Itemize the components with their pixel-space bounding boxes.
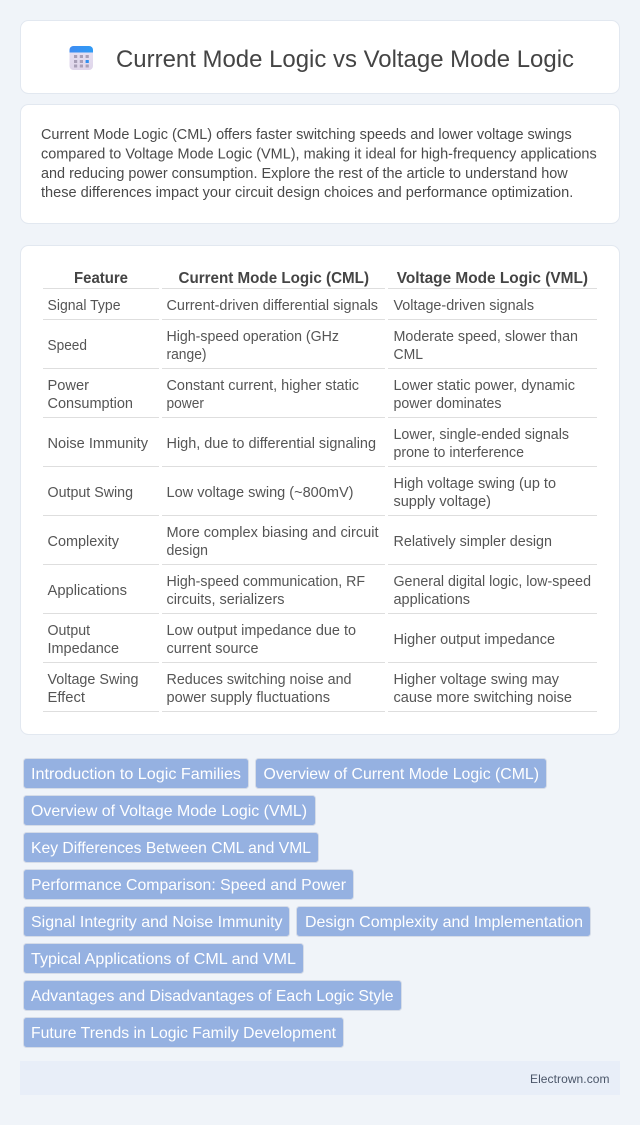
tag: VML overview — [24, 796, 316, 826]
table header row: Voltage Mode Logic (VML) — [397, 270, 588, 287]
row: power consumption: Constant current, higher static — [166, 378, 359, 394]
row: voltage swing effect: Effect — [48, 690, 85, 706]
row: noise immunity: Lower, single-ended signals — [394, 427, 569, 443]
row: output swing: High voltage swing (up to — [394, 476, 556, 492]
row: output impedance: Output — [48, 623, 90, 639]
row: voltage swing effect — [43, 672, 597, 712]
row: noise immunity — [43, 427, 597, 467]
tag: design complexity — [296, 906, 590, 936]
tag: key differences — [24, 832, 318, 862]
tag: typical applications: Typical Applications of CML and VML — [31, 951, 296, 968]
tag: future trends — [24, 1018, 344, 1048]
row: output swing — [43, 476, 597, 516]
row: applications: applications — [394, 592, 470, 608]
panel: introduction — [20, 104, 620, 224]
row: signal type: Current-driven differential signals — [166, 298, 378, 314]
row: speed: Moderate speed, slower than — [394, 329, 578, 345]
row: applications: General digital logic, low-speed — [394, 574, 591, 590]
row: voltage swing effect: cause more switching noise — [394, 690, 572, 706]
panel: title header — [20, 20, 620, 94]
row: noise immunity: Noise Immunity — [48, 436, 149, 452]
tag: performance — [24, 870, 354, 900]
tag: introduction — [24, 758, 248, 788]
intro paragraph — [41, 127, 597, 201]
row: applications: circuits, serializers — [166, 592, 284, 608]
row: speed: CML — [394, 347, 423, 363]
row: speed: High-speed operation (GHz — [166, 329, 339, 345]
row: output swing: supply voltage) — [394, 494, 491, 510]
intro paragraph: compared to Voltage Mode Logic (VML), making it ideal for high-frequency applications — [41, 146, 597, 162]
row: output swing: Output Swing — [48, 485, 133, 501]
row: power consumption: Consumption — [48, 396, 133, 412]
row: output impedance: current source — [166, 641, 258, 657]
tag: advantages — [24, 980, 402, 1010]
row: power consumption: Lower static power, dynamic — [394, 378, 575, 394]
row: output impedance: Higher output impedance — [394, 632, 555, 648]
row: applications: Applications — [48, 583, 127, 599]
row: voltage swing effect: Higher voltage swing may — [394, 672, 560, 688]
panel: comparison table — [20, 246, 620, 734]
icon: calendar grid — [70, 46, 93, 70]
row: noise immunity: prone to interference — [394, 445, 524, 461]
row: power consumption: power — [166, 396, 204, 412]
tag: advantages: Advantages and Disadvantages of Each Logic Style — [31, 988, 394, 1005]
row: signal type: Signal Type — [48, 298, 120, 314]
row: speed — [43, 329, 597, 369]
table header row: Feature — [74, 270, 128, 287]
tag: performance: Performance Comparison: Speed and Power — [31, 877, 347, 894]
row: voltage swing effect: power supply fluctuations — [166, 690, 330, 706]
row: output swing: Low voltage swing (~800mV) — [166, 485, 354, 501]
row: output impedance: Impedance — [48, 641, 119, 657]
tag: introduction: Introduction to Logic Families — [31, 766, 241, 783]
row: speed: range) — [166, 347, 206, 363]
table header row — [43, 270, 597, 289]
row: voltage swing effect: Voltage Swing — [48, 672, 138, 688]
row: complexity: Relatively simpler design — [394, 534, 552, 550]
tag: signal integrity: Signal Integrity and Noise Immunity — [31, 914, 282, 931]
row: complexity — [43, 525, 597, 565]
row: noise immunity: High, due to differential signaling — [166, 436, 376, 452]
tag: CML overview: Overview of Current Mode Logic (CML) — [264, 766, 539, 783]
title: Current Mode Logic vs Voltage Mode Logic — [116, 46, 574, 73]
intro paragraph: and reducing power consumption. Explore the rest of the article to understand how — [41, 166, 568, 182]
row: complexity: More complex biasing and circuit — [166, 525, 378, 541]
row: applications: High-speed communication, RF — [166, 574, 365, 590]
row: voltage swing effect: Reduces switching noise and — [166, 672, 352, 688]
row: complexity: Complexity — [48, 534, 120, 550]
tag: future trends: Future Trends in Logic Family Development — [31, 1025, 337, 1042]
row: power consumption: power dominates — [394, 396, 502, 412]
table header row: Current Mode Logic (CML) — [178, 270, 369, 287]
footer: Electrown.com — [530, 1072, 610, 1086]
row: complexity: design — [166, 543, 208, 559]
row: output impedance: Low output impedance due to — [166, 623, 356, 639]
tag: VML overview: Overview of Voltage Mode Logic (VML) — [31, 803, 307, 820]
panel: topic tags — [24, 758, 590, 1048]
tag: CML overview — [256, 758, 546, 788]
tag: typical applications — [24, 944, 304, 974]
tag: key differences: Key Differences Between CML and VML — [31, 840, 311, 857]
row: power consumption — [43, 378, 597, 418]
intro paragraph: these differences impact your circuit design choices and performance optimization. — [41, 185, 573, 201]
row: signal type — [43, 298, 597, 320]
row: power consumption: Power — [48, 378, 89, 394]
intro paragraph: Current Mode Logic (CML) offers faster switching speeds and lower voltage swings — [41, 127, 572, 143]
row: signal type: Voltage-driven signals — [394, 298, 534, 314]
tag: signal integrity — [24, 906, 290, 936]
footer — [20, 1061, 620, 1095]
tag: design complexity: Design Complexity and Implementation — [305, 914, 583, 931]
row: output impedance — [43, 623, 597, 663]
row: speed: Speed — [48, 338, 87, 354]
row: applications — [43, 574, 597, 614]
